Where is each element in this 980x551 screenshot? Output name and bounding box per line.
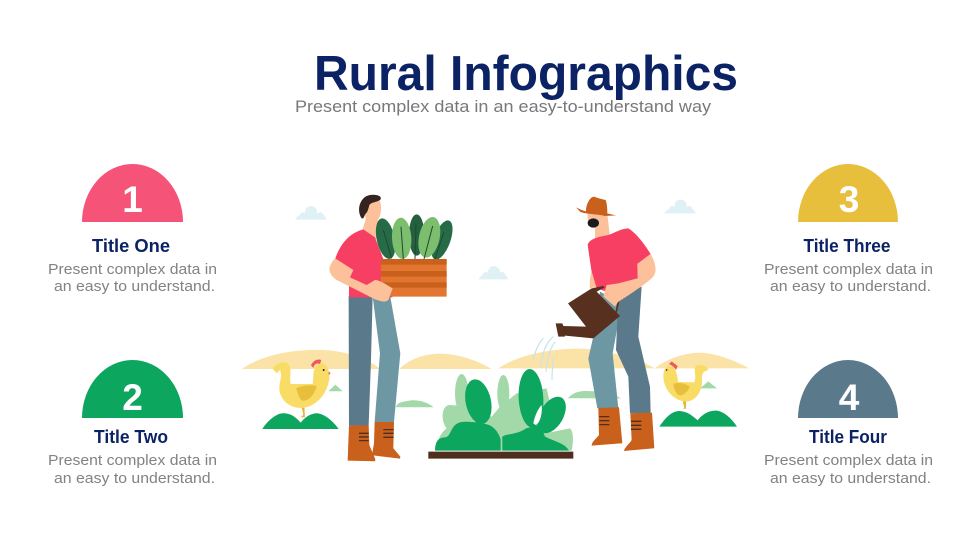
badge 1	[82, 164, 183, 222]
badge 3: 3	[839, 179, 859, 220]
illustration: right scene	[498, 200, 749, 451]
grass mound right	[659, 411, 737, 427]
farmer legs and boots	[588, 287, 654, 451]
cloud middle	[478, 266, 508, 279]
badge 2: 2	[122, 377, 143, 418]
plant and planter	[428, 368, 573, 459]
badge 2	[82, 360, 183, 418]
chicken left	[273, 360, 331, 417]
grass mound under chicken	[262, 413, 339, 429]
man upper body with crate	[329, 195, 457, 302]
shirt	[588, 228, 651, 292]
badge 4: 4	[839, 377, 860, 418]
neck and face	[587, 212, 611, 238]
panel: item 1	[48, 164, 217, 295]
body text 3: Present complex data in	[764, 262, 933, 278]
body text 2: Present complex data in	[48, 453, 217, 469]
chicken right	[663, 361, 708, 409]
arm	[603, 254, 656, 307]
heading 4: Title Four	[809, 427, 887, 447]
badge 4	[798, 360, 898, 418]
water drops	[533, 337, 555, 380]
leaf gap	[533, 405, 542, 425]
body text 2: an easy to understand.	[54, 471, 215, 487]
panel: item 4	[764, 360, 933, 487]
green mounds	[328, 385, 434, 407]
man legs and boots	[348, 295, 400, 461]
panel: item 2	[48, 360, 217, 487]
watering can	[556, 286, 620, 338]
badge 3	[798, 164, 898, 222]
hat	[576, 197, 616, 216]
badge 1: 1	[122, 179, 143, 220]
heading 1: Title One	[92, 236, 170, 256]
body text 4: Present complex data in	[764, 453, 933, 469]
sand hills right	[498, 349, 749, 368]
farmer upper body	[556, 197, 656, 338]
leaves	[373, 214, 457, 262]
body text 4: an easy to understand.	[770, 471, 931, 487]
heading 2: Title Two	[94, 427, 168, 447]
panel: item 3	[764, 164, 933, 295]
hair	[359, 195, 381, 218]
subtitle: Present complex data in an easy-to-understand way	[295, 97, 712, 116]
shirt	[335, 229, 393, 297]
cloud right	[664, 200, 696, 213]
green mounds	[568, 381, 717, 398]
beard	[588, 218, 599, 228]
back leaves	[437, 374, 573, 451]
body text 1: Present complex data in	[48, 262, 217, 278]
body text 3: an easy to understand.	[770, 279, 931, 295]
crate	[381, 259, 447, 297]
front leaves	[435, 368, 572, 451]
body text 1: an easy to understand.	[54, 279, 215, 295]
title: Rural Infographics	[314, 47, 738, 101]
arm	[329, 258, 393, 302]
illustration: left scene	[242, 206, 508, 461]
neck and face	[363, 199, 381, 239]
sand hills left	[242, 350, 492, 369]
planter	[428, 452, 573, 459]
heading 3: Title Three	[804, 236, 890, 256]
far arm	[590, 270, 598, 288]
cloud left	[295, 206, 326, 220]
